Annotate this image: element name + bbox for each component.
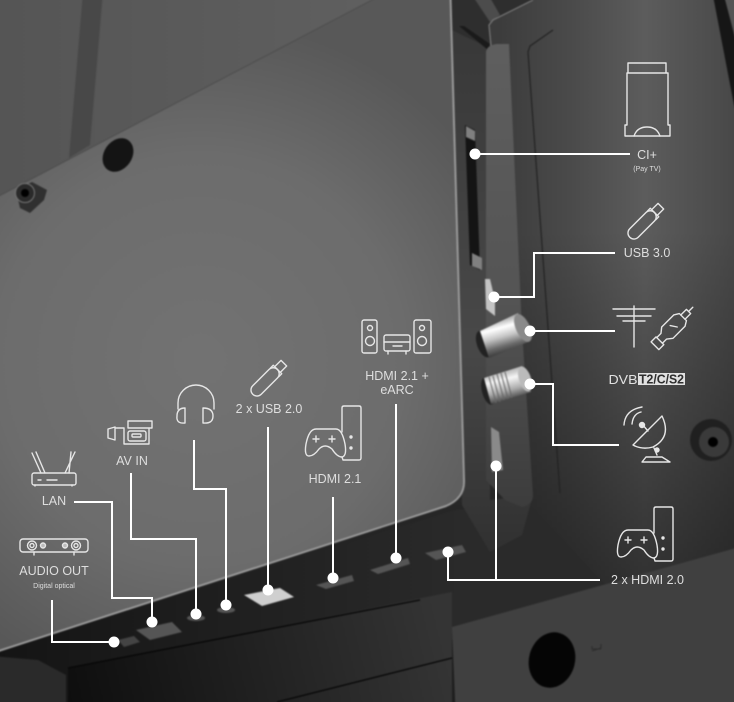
- upper left wall: [0, 0, 410, 206]
- callout: AV IN: AV IN: [116, 454, 148, 468]
- callout: AUDIO OUT: Digital optical: [33, 583, 75, 590]
- DVB logo: T2/C/S2: [639, 372, 684, 386]
- ceiling highlight: [489, 0, 533, 46]
- lower chassis band: [0, 505, 620, 702]
- panel edge highlight: [0, 0, 464, 657]
- recess top shadow: [459, 26, 490, 50]
- top right corner: [720, 0, 734, 110]
- callout: HDMI 2.1 + eARC: [362, 320, 431, 564]
- callout: LAN: LAN: [42, 494, 66, 508]
- top panel crease: [0, 0, 410, 206]
- top ceiling: [440, 0, 570, 50]
- vertical bracket: [69, 0, 104, 158]
- DVB logo: [608, 372, 685, 387]
- USB 3.0 port: [485, 279, 495, 316]
- CI slot: [465, 125, 482, 270]
- rear panel: [0, 0, 463, 656]
- callout: LAN: [32, 452, 158, 628]
- icon: console and gamepad: [305, 406, 361, 460]
- callout: 2 x USB 2.0: [236, 359, 302, 596]
- front panel mark: [592, 644, 601, 651]
- icon: camcorder: [108, 421, 152, 444]
- front panel hole: [523, 627, 581, 693]
- callout: HDMI 2.1 + eARC: HDMI 2.1 +: [365, 369, 429, 383]
- callout: CI+: CI+: [637, 148, 657, 162]
- front lower panel: [452, 543, 734, 702]
- icon: speakers and receiver: [362, 320, 431, 354]
- icon: coax plug: [649, 302, 698, 351]
- ceiling band: [462, 0, 500, 22]
- callout: satellite: [524, 378, 670, 462]
- icon: CI card: [625, 63, 670, 136]
- callout: CI+: (Pay TV): [633, 166, 661, 173]
- icon: headphones: [177, 385, 214, 423]
- callout: HDMI 2.1 + eARC: eARC: [380, 383, 414, 397]
- top right black edge: [710, 0, 734, 180]
- port recess: [451, 30, 533, 552]
- callout: AUDIO OUT: [19, 539, 120, 648]
- seam on cabinet wall: [528, 30, 560, 493]
- chassis seam lines: [68, 600, 452, 702]
- callout: AV IN: [108, 421, 202, 620]
- callout: USB 3.0: [488, 202, 670, 302]
- mounting screw right: [690, 419, 732, 461]
- callout: HDMI 2.1: HDMI 2.1: [309, 472, 361, 486]
- satellite connector: [479, 365, 535, 406]
- callout: AUDIO OUT: AUDIO OUT: [19, 564, 89, 578]
- icon: console and gamepad: [617, 507, 673, 561]
- icon: router: [32, 452, 76, 486]
- chassis lower face: [68, 592, 452, 702]
- mounting screw left: [16, 182, 47, 213]
- callout: HDMI 2.1: [305, 406, 361, 584]
- icon: USB stick: [625, 202, 665, 242]
- bottom connectors: [118, 545, 466, 647]
- callout: CI+: [470, 63, 670, 173]
- port module light strip: [486, 44, 533, 507]
- DVB logo: DVB: [608, 372, 638, 387]
- mounting hole: [96, 132, 140, 178]
- callout: 2 x HDMI 2.0: [442, 460, 684, 587]
- icon: USB stick: [248, 359, 288, 399]
- antenna connector: [473, 311, 536, 360]
- icon: sound bar: [20, 539, 88, 555]
- icon: antenna: [613, 306, 655, 347]
- HDMI side port: [491, 427, 503, 472]
- icon: satellite dish: [624, 407, 670, 462]
- callout: terrestrial antenna: [524, 302, 698, 351]
- callout: 2 x HDMI 2.0: 2 x HDMI 2.0: [611, 573, 684, 587]
- callout: 2 x USB 2.0: 2 x USB 2.0: [236, 402, 302, 416]
- callout: USB 3.0: USB 3.0: [624, 246, 670, 260]
- chassis left corner: [0, 655, 66, 702]
- callout: headphones: [177, 385, 232, 610]
